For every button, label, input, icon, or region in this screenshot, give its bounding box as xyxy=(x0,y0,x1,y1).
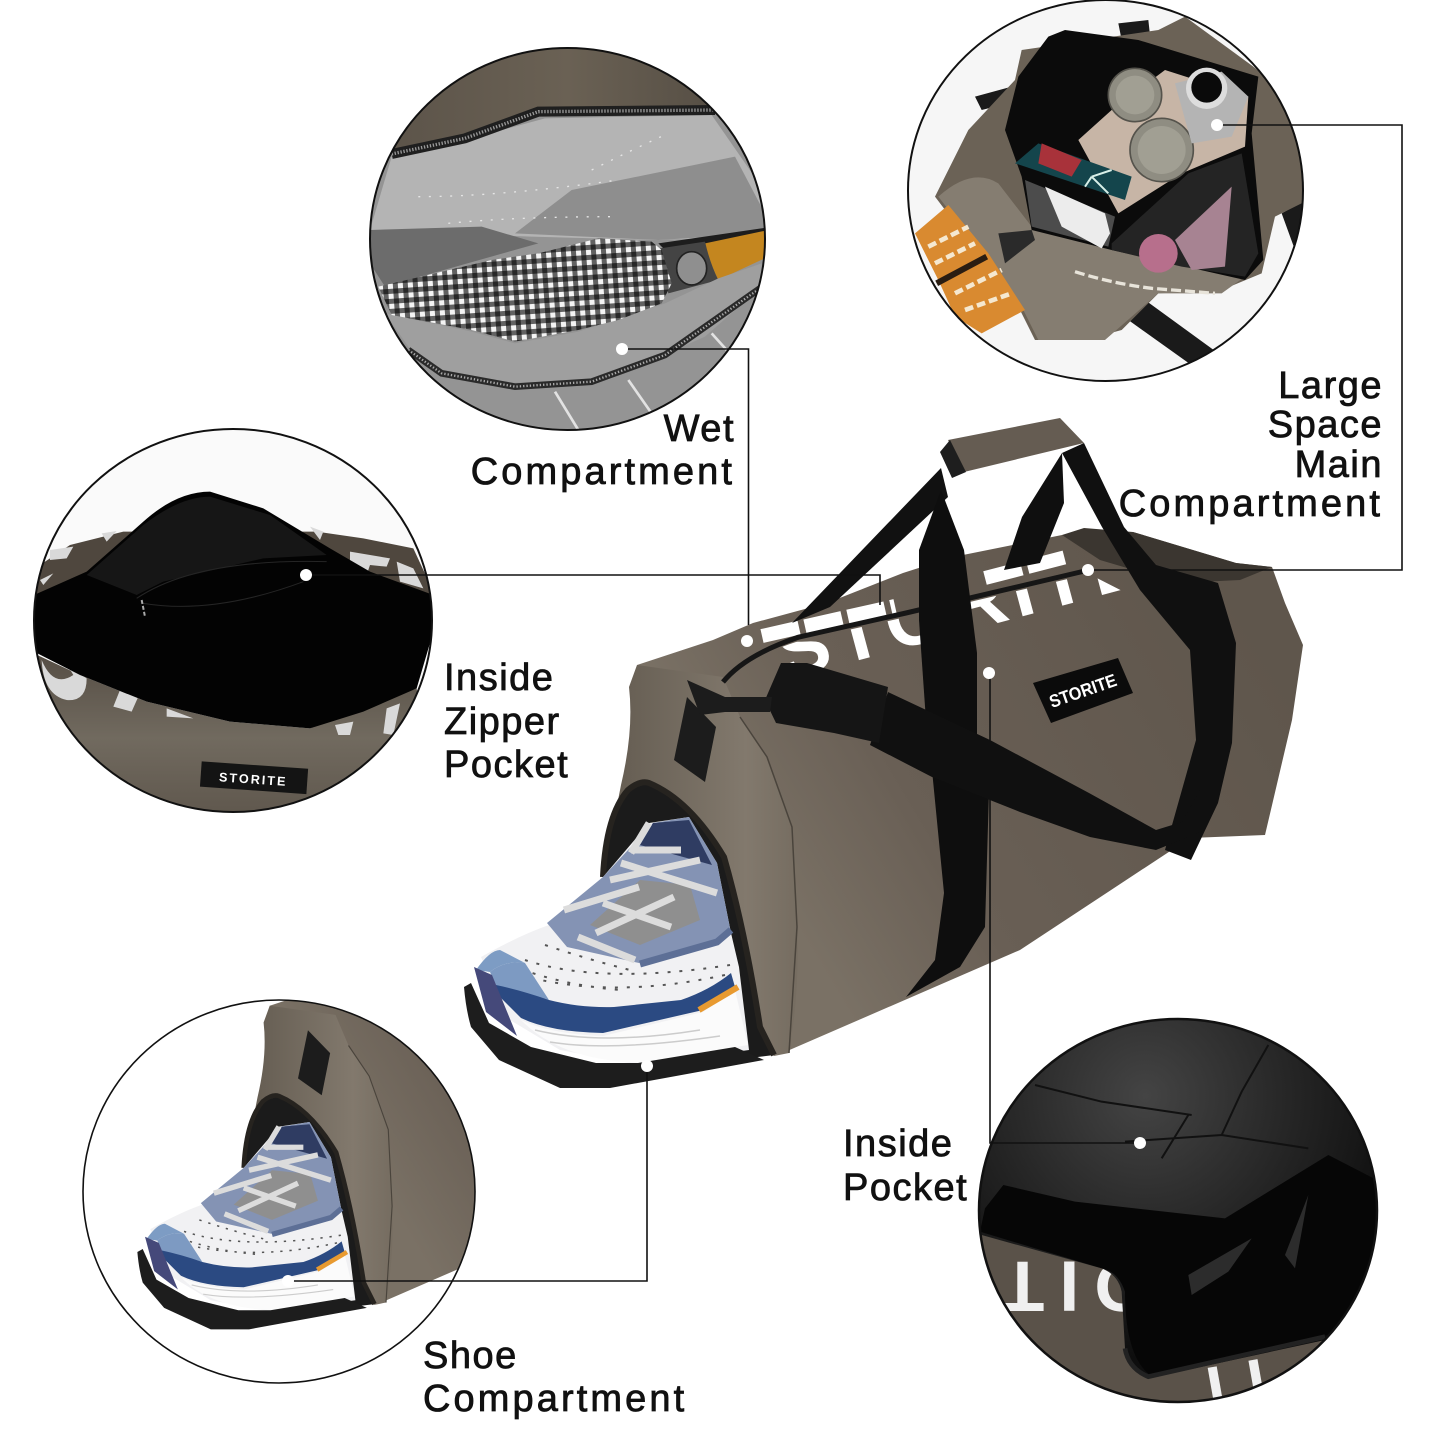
label: large space main compartment: Compartment xyxy=(1119,483,1383,525)
white print fragments on rim xyxy=(40,527,423,588)
black interior opening xyxy=(34,492,433,728)
beige contents base xyxy=(1078,70,1248,213)
bag body, end panel and shoe xyxy=(464,532,1303,1088)
inside zipper xyxy=(137,561,327,617)
lettering above zipper xyxy=(762,556,1070,636)
label: wet compartment: Compartment xyxy=(471,451,735,493)
label: large space main compartment: Main xyxy=(1295,444,1383,486)
mesh pouch xyxy=(1112,153,1258,277)
label: large space main compartment: Large xyxy=(1278,365,1383,407)
printed lettering upside down: IT xyxy=(1178,1345,1271,1428)
bag front flap xyxy=(938,177,1245,340)
shoulder strap xyxy=(870,692,1205,850)
open bag exterior xyxy=(935,17,1308,340)
label: wet compartment: Wet xyxy=(664,408,735,450)
panel: inside pocket detail circle xyxy=(975,1015,1380,1428)
STORITE label xyxy=(200,761,308,794)
shoe compartment enlarged xyxy=(137,1000,474,1330)
brown bag rim xyxy=(982,1235,1322,1401)
zipper pull xyxy=(998,230,1035,263)
panel: large main compartment detail circle xyxy=(905,0,1310,405)
camera xyxy=(1175,68,1248,143)
frame rails xyxy=(555,333,727,430)
panel: shoe compartment detail circle xyxy=(82,999,476,1384)
wet lining xyxy=(370,115,768,240)
STORITE label: STORITE xyxy=(219,770,288,789)
label: inside pocket: Inside xyxy=(843,1123,953,1165)
flap tear highlight xyxy=(1075,272,1215,293)
label: inside zipper pocket: Zipper xyxy=(444,701,561,743)
lining creases xyxy=(1035,1045,1308,1158)
striped umbrella xyxy=(1015,143,1132,200)
printed lettering upside down: OIT xyxy=(986,1246,1150,1326)
straps xyxy=(975,20,1305,370)
folded umbrella xyxy=(378,238,672,342)
label: shoe compartment: Shoe xyxy=(423,1335,518,1377)
lower zipper xyxy=(408,288,760,387)
label: inside zipper pocket: Inside xyxy=(444,657,554,699)
lower zipper xyxy=(1125,1337,1325,1377)
label: shoe compartment: Compartment xyxy=(423,1378,687,1420)
grab handle xyxy=(792,418,1084,735)
white print fragments below opening xyxy=(42,660,400,735)
printed lettering: STORITE xyxy=(767,514,1152,696)
lower webbing strap xyxy=(906,770,989,997)
strap buckle xyxy=(765,663,888,743)
black interior xyxy=(1005,30,1263,280)
upper zipper xyxy=(392,110,715,154)
panel: inside zipper pocket detail circle xyxy=(30,425,435,825)
STORITE patch xyxy=(1033,658,1133,723)
label: inside zipper pocket: Pocket xyxy=(444,744,569,786)
brown bag exterior at top xyxy=(395,49,707,148)
orange printed shoes xyxy=(915,205,1025,333)
label: inside pocket: Pocket xyxy=(843,1167,968,1209)
flap at far end xyxy=(1062,528,1272,583)
label: large space main compartment: Space xyxy=(1268,404,1383,446)
lower lining xyxy=(385,263,762,383)
grey organiser and white item xyxy=(1025,180,1115,247)
panel: wet compartment detail circle xyxy=(365,30,770,435)
round containers xyxy=(1108,68,1193,182)
lower brown bag face xyxy=(38,656,417,811)
zipper xyxy=(723,570,1089,682)
dark lining xyxy=(87,497,327,595)
metal clip xyxy=(687,680,772,715)
STORITE patch: STORITE xyxy=(1047,670,1119,712)
inner pocket xyxy=(980,1155,1380,1378)
printed lettering upside down xyxy=(986,1246,1271,1428)
brown rear rim xyxy=(36,532,429,594)
panel: duffel bag with shoe xyxy=(464,418,1303,1088)
callout lines and dots xyxy=(282,119,1402,1287)
water droplets xyxy=(418,133,668,223)
umbrella handle xyxy=(658,227,768,293)
right webbing strap xyxy=(1062,443,1236,860)
